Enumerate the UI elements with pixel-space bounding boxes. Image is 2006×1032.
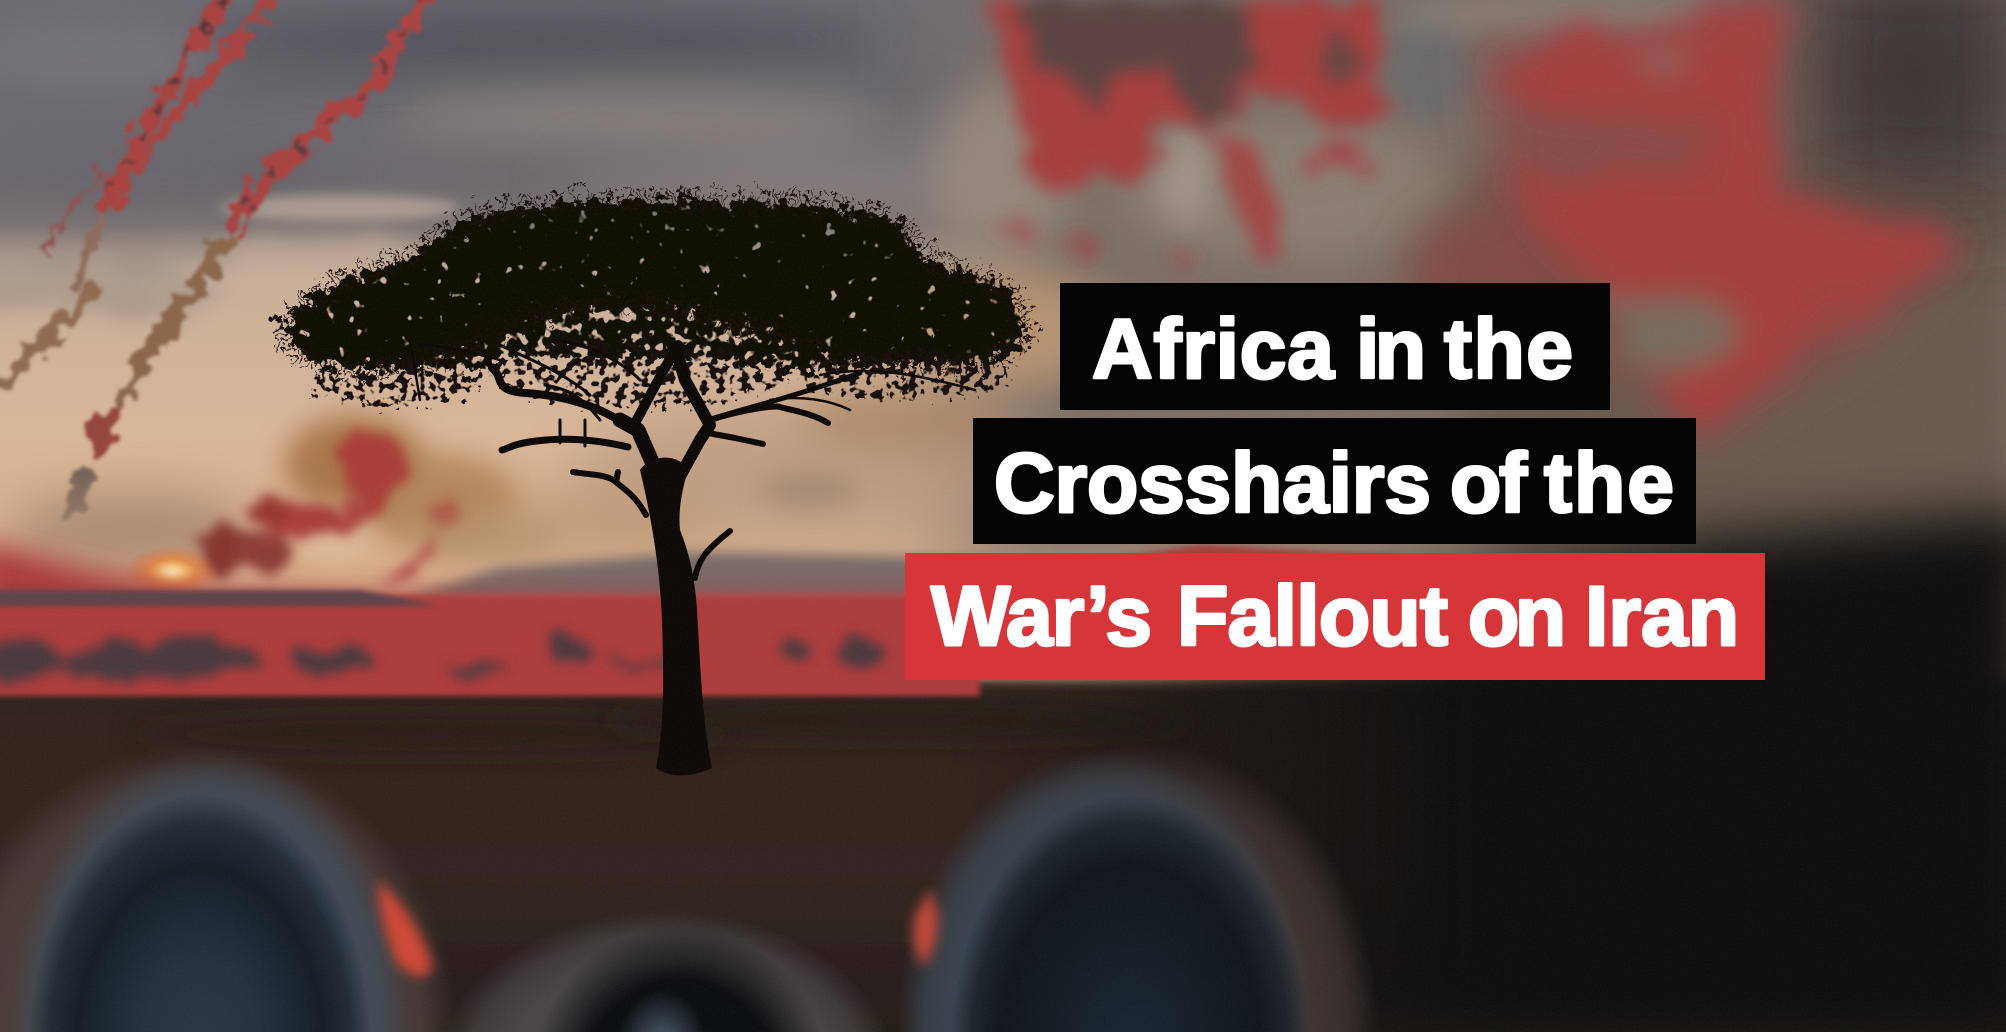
left glint xyxy=(378,880,432,977)
title line 3: War’s xyxy=(931,569,1152,663)
right glint xyxy=(913,890,938,965)
title line 2 xyxy=(973,418,1696,544)
title line 3: on xyxy=(1468,569,1566,663)
left barrel xyxy=(0,740,460,1032)
background: sky xyxy=(0,0,2006,720)
explosion glow xyxy=(124,546,220,598)
red smoke puffs xyxy=(197,431,463,590)
tree crown: solid mass xyxy=(285,200,1023,369)
title line 1 xyxy=(1060,283,1610,410)
rocket trail: middle xyxy=(110,0,268,205)
ground xyxy=(0,680,2006,1032)
binoculars xyxy=(0,740,1385,1032)
tree crown: edge hairs xyxy=(285,200,1023,369)
distant hills xyxy=(0,540,1400,640)
red overlay: sky blot centre xyxy=(985,0,1388,272)
red wash: sky right xyxy=(1400,40,1970,440)
tree crown: lower twigs xyxy=(310,338,1010,406)
smoke clouds behind tree xyxy=(10,415,710,570)
title line 2: Crosshairs xyxy=(994,436,1431,530)
rocket trail: left xyxy=(0,0,224,385)
tree trunk xyxy=(640,458,712,776)
title line 1: Africa xyxy=(1092,302,1335,396)
title line 3: Fallout xyxy=(1177,569,1448,663)
title line 1: in xyxy=(1356,302,1426,396)
red band: plain xyxy=(0,590,980,696)
acacia tree xyxy=(285,200,1023,776)
rocket trail: right xyxy=(70,0,428,515)
title line 3: Iran xyxy=(1585,569,1739,663)
title line 2: of xyxy=(1450,436,1528,530)
title line 3 xyxy=(905,553,1765,680)
elephant silhouettes xyxy=(0,636,884,684)
right darkness xyxy=(1055,477,2006,1032)
title line 2: the xyxy=(1544,436,1674,530)
tree branches xyxy=(410,340,975,578)
title line 1: the xyxy=(1444,302,1573,396)
bridge xyxy=(425,905,905,1032)
right barrel xyxy=(895,740,1385,1032)
title xyxy=(905,283,1765,680)
tree crown: speckled middle xyxy=(370,274,930,374)
red overlay: sky blot right xyxy=(1480,0,1975,445)
